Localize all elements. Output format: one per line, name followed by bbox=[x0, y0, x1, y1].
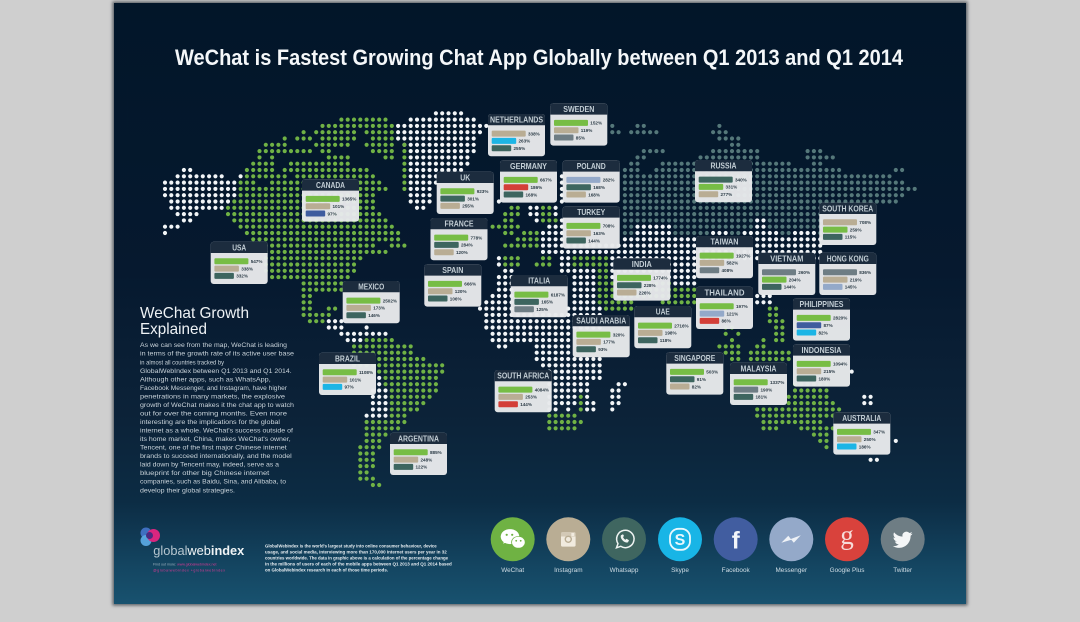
France bars: 120% bbox=[456, 250, 468, 255]
legend: Google Plus: Google Plus bbox=[830, 567, 864, 574]
UAE bars: 118% bbox=[660, 338, 671, 343]
card: Argentina bbox=[390, 433, 447, 475]
icon: Twitter bird bbox=[893, 532, 913, 548]
Italia bars: 165% bbox=[541, 300, 553, 305]
Vietnam heading: VIETNAM bbox=[770, 253, 803, 263]
icon: Instagram camera bbox=[561, 532, 576, 547]
Malaysia bars: 181% bbox=[756, 395, 767, 400]
India bars: 1774% bbox=[653, 276, 668, 281]
India heading: INDIA bbox=[632, 259, 652, 269]
Netherlands bars: 255% bbox=[514, 146, 525, 151]
title: WeChat is Fastest Growing Chat App Globally between Q1 2013 and Q1 2014 bbox=[175, 45, 903, 70]
about GlobalWebIndex text: on GlobalWebIndex research in each of those time periods. bbox=[265, 568, 388, 572]
Taiwan bars: 408% bbox=[722, 268, 733, 273]
explanation text block: internet as a whole. WeChat's success outside of bbox=[140, 428, 293, 434]
Spain bars: 120% bbox=[455, 289, 467, 294]
map: green dots bbox=[228, 120, 840, 485]
icon: Whatsapp phone bbox=[616, 530, 634, 548]
Canada bars: 97% bbox=[328, 211, 337, 216]
South Africa bars bbox=[498, 387, 549, 407]
Brazil bars bbox=[323, 369, 373, 390]
Argentina heading: ARGENTINA bbox=[398, 433, 439, 443]
India bars: 228% bbox=[644, 283, 656, 288]
Russia heading: RUSSIA bbox=[710, 161, 736, 171]
USA bars: 547% bbox=[251, 259, 262, 264]
Philippines bars bbox=[797, 315, 847, 336]
card: Mexico bbox=[343, 281, 400, 323]
Saudi Arabia heading: SAUDI ARABIA bbox=[576, 316, 626, 326]
explanation text block: in almost all countries tracked by bbox=[140, 359, 225, 366]
Mexico heading: MEXICO bbox=[358, 282, 385, 292]
Brazil bars: 97% bbox=[344, 385, 354, 390]
icon: Messenger bolt bbox=[781, 535, 801, 543]
Sweden bars bbox=[554, 120, 602, 140]
explanation text block: Facebook Messenger, and Instagram, have higher bbox=[140, 385, 288, 392]
UK heading: UK bbox=[460, 172, 470, 182]
South Africa bars: 4084% bbox=[535, 387, 549, 392]
Russia bars: 331% bbox=[726, 185, 737, 190]
Brazil bars: 101% bbox=[350, 377, 361, 382]
explanation text block: Tencent, one of the first major Chinese internet bbox=[140, 445, 287, 452]
Germany bars: 186% bbox=[530, 185, 542, 190]
Taiwan bars bbox=[700, 253, 750, 273]
Italia heading: ITALIA bbox=[528, 276, 550, 286]
Saudi Arabia bars: 177% bbox=[603, 340, 615, 345]
explanation text block: laid down by Tencent may, indeed, serve as a bbox=[140, 462, 279, 469]
Australia bars bbox=[837, 429, 885, 450]
card: Poland bbox=[563, 160, 620, 203]
Sweden bars: 119% bbox=[581, 128, 592, 133]
Singapore bars bbox=[670, 369, 718, 390]
legend: Facebook bbox=[714, 517, 758, 574]
Thailand bars: 197% bbox=[736, 304, 748, 309]
Thailand bars bbox=[700, 303, 748, 324]
Poland heading: POLAND bbox=[577, 161, 606, 171]
legend: Skype bbox=[658, 517, 702, 574]
about GlobalWebIndex text: usage, and social media, interviewing more than 170,000 internet users per year in 32 bbox=[265, 550, 447, 554]
Sweden bars: 85% bbox=[576, 135, 585, 140]
explanation text block: As we can see from the map, WeChat is leading bbox=[140, 342, 287, 349]
Germany bars: 667% bbox=[540, 178, 552, 183]
Sweden bars: 152% bbox=[590, 121, 602, 126]
card: UK bbox=[437, 172, 494, 214]
Netherlands heading: NETHERLANDS bbox=[490, 115, 543, 125]
Singapore bars: 503% bbox=[706, 370, 718, 375]
Russia bars bbox=[699, 177, 747, 197]
Spain bars bbox=[428, 281, 476, 302]
Philippines heading: PHILIPPINES bbox=[800, 299, 844, 309]
legend: Twitter: Twitter bbox=[893, 567, 913, 574]
icon: Facebook f: f bbox=[732, 527, 741, 554]
about GlobalWebIndex text: GlobalWebIndex is the world's largest study into online consumer behaviour, device bbox=[265, 544, 437, 548]
Vietnam bars: 260% bbox=[798, 270, 810, 275]
India bars bbox=[617, 275, 668, 296]
card: Sweden bbox=[550, 103, 607, 146]
legend: Skype: Skype bbox=[671, 567, 689, 574]
Australia heading: AUSTRALIA bbox=[842, 413, 881, 423]
Vietnam bars: 144% bbox=[784, 285, 796, 290]
Indonesia bars: 180% bbox=[818, 376, 830, 381]
Germany bars: 168% bbox=[526, 192, 537, 197]
explanation text block: GlobalWebIndex between Q1 2013 and Q1 2014. bbox=[140, 368, 292, 375]
Philippines bars: 87% bbox=[824, 323, 833, 328]
Italia bars: 6187% bbox=[551, 292, 565, 297]
card: Philippines bbox=[793, 298, 850, 341]
USA bars: 338% bbox=[241, 266, 253, 271]
card: India bbox=[613, 258, 670, 301]
globalwebindex logo bbox=[140, 528, 245, 558]
legend: WeChat bbox=[491, 517, 535, 574]
South Korea bars: 115% bbox=[845, 235, 856, 240]
Hong Kong bars: 836% bbox=[859, 270, 871, 275]
card: Hong Kong bbox=[819, 253, 876, 295]
card: Thailand bbox=[696, 287, 753, 329]
card: Russia bbox=[695, 160, 752, 202]
Russia bars: 340% bbox=[735, 177, 747, 182]
Canada heading: CANADA bbox=[316, 180, 345, 190]
Netherlands bars bbox=[492, 131, 540, 151]
UK bars: 301% bbox=[467, 196, 479, 201]
explanation text block: in terms of the growth rate of its active user base bbox=[140, 351, 294, 358]
South Korea bars: 708% bbox=[859, 220, 871, 225]
legend: Facebook: Facebook bbox=[722, 567, 751, 574]
Thailand bars: 86% bbox=[722, 319, 731, 324]
Argentina bars bbox=[394, 449, 442, 470]
poster panel bbox=[114, 3, 966, 604]
card: Taiwan bbox=[696, 236, 753, 278]
Mexico bars: 173% bbox=[373, 306, 385, 311]
France bars: 778% bbox=[470, 235, 482, 240]
South Korea bars bbox=[823, 219, 871, 240]
legend: Whatsapp bbox=[602, 517, 646, 574]
France bars: 284% bbox=[461, 243, 473, 248]
legend: Instagram: Instagram bbox=[554, 567, 583, 574]
about GlobalWebIndex text bbox=[265, 544, 452, 572]
card: Germany bbox=[500, 160, 557, 203]
Argentina bars: 122% bbox=[416, 465, 427, 470]
legend: Instagram bbox=[546, 517, 590, 574]
Saudi Arabia bars bbox=[576, 332, 624, 352]
explanation text block: blueprint for other big Chinese internet bbox=[140, 470, 270, 477]
Australia bars: 347% bbox=[873, 430, 885, 435]
Indonesia bars: 1094% bbox=[833, 362, 847, 367]
Brazil heading: BRAZIL bbox=[335, 353, 360, 363]
icon: Skype S: S bbox=[675, 532, 686, 549]
Spain bars: 106% bbox=[450, 296, 462, 301]
Spain heading: SPAIN bbox=[442, 265, 463, 275]
Malaysia bars: 1337% bbox=[770, 380, 784, 385]
Malaysia bars bbox=[734, 379, 784, 400]
Canada bars: 1365% bbox=[342, 197, 356, 202]
explanation text block: Although other apps, such as WhatsApp, bbox=[140, 376, 271, 383]
explanation text block: its home market, China, makes WeChat's owner, bbox=[140, 436, 291, 443]
Indonesia bars bbox=[797, 361, 847, 382]
Philippines bars: 82% bbox=[818, 330, 828, 335]
Spain bars: 666% bbox=[464, 282, 476, 287]
UK bars: 923% bbox=[477, 189, 488, 194]
Turkey bars bbox=[566, 223, 614, 244]
Australia bars: 250% bbox=[864, 437, 876, 442]
explanation text block: brands to succeed internationally, and the model bbox=[140, 453, 292, 460]
legend: Whatsapp: Whatsapp bbox=[610, 567, 639, 574]
logo contact links: Find out more: www.globalwebindex.net bbox=[153, 562, 217, 566]
South Africa heading: SOUTH AFRICA bbox=[497, 371, 549, 381]
card: Spain bbox=[424, 264, 481, 307]
Thailand heading: THAILAND bbox=[704, 287, 744, 297]
Germany heading: GERMANY bbox=[510, 161, 547, 171]
Argentina bars: 885% bbox=[430, 450, 442, 455]
card: USA bbox=[211, 242, 268, 284]
explanation text block: develop their global strategies. bbox=[140, 487, 235, 494]
USA bars: 332% bbox=[236, 274, 248, 279]
Indonesia heading: INDONESIA bbox=[802, 345, 842, 355]
Mexico bars: 2502% bbox=[383, 298, 397, 303]
Mexico bars bbox=[346, 298, 397, 318]
Canada bars: 101% bbox=[332, 204, 344, 209]
Vietnam bars: 204% bbox=[789, 277, 801, 282]
Mexico bars: 146% bbox=[368, 313, 380, 318]
South Africa bars: 253% bbox=[525, 395, 537, 400]
explanation text block bbox=[140, 342, 294, 494]
UAE bars bbox=[638, 323, 689, 343]
card: Malaysia bbox=[730, 363, 787, 405]
card: South Korea bbox=[819, 203, 876, 245]
icon: Google g: g bbox=[840, 520, 854, 550]
USA bars bbox=[214, 258, 262, 279]
Turkey heading: TURKEY bbox=[577, 207, 606, 217]
legend: Twitter bbox=[881, 517, 925, 574]
Thailand bars: 121% bbox=[726, 311, 738, 316]
France bars bbox=[434, 235, 482, 255]
card: Australia bbox=[833, 412, 890, 455]
UAE heading: UAE bbox=[656, 307, 670, 317]
Hong Kong bars bbox=[823, 269, 871, 290]
Poland bars: 282% bbox=[603, 178, 614, 183]
Poland bars: 168% bbox=[593, 185, 605, 190]
card: Indonesia bbox=[793, 344, 850, 387]
about GlobalWebIndex text: countries worldwide. The data in graphic above is a calculation of the percentage change bbox=[265, 556, 448, 560]
Turkey bars: 163% bbox=[593, 231, 605, 236]
UK bars: 255% bbox=[462, 204, 474, 209]
Sweden heading: SWEDEN bbox=[563, 104, 594, 114]
UAE bars: 198% bbox=[665, 331, 677, 336]
USA heading: USA bbox=[232, 242, 246, 252]
Singapore bars: 82% bbox=[692, 384, 701, 389]
Poland bars bbox=[566, 177, 614, 198]
Canada bars bbox=[306, 196, 356, 216]
Malaysia bars: 190% bbox=[760, 387, 772, 392]
Singapore heading: SINGAPORE bbox=[674, 353, 716, 363]
Hong Kong heading: HONG KONG bbox=[827, 253, 869, 263]
explanation text block: out for over the coming months. Even more bbox=[140, 410, 287, 418]
legend: Messenger bbox=[769, 517, 813, 574]
card: Singapore bbox=[666, 352, 723, 395]
Germany bars bbox=[504, 177, 552, 198]
card: France bbox=[430, 218, 488, 260]
explanation text block: growth of WeChat makes it the chat app to watch bbox=[140, 402, 294, 409]
logo contact links: @globalwebindex +globalwebindex bbox=[153, 568, 225, 572]
legend: WeChat: WeChat bbox=[501, 567, 524, 574]
Italia bars bbox=[514, 292, 565, 312]
Poland bars: 168% bbox=[588, 192, 600, 197]
card: Turkey bbox=[563, 206, 620, 249]
Taiwan bars: 582% bbox=[726, 261, 738, 266]
South Korea heading: SOUTH KOREA bbox=[822, 203, 873, 213]
explanation text block: penetrations in many markets, the explosive bbox=[140, 393, 285, 400]
Turkey bars: 144% bbox=[588, 238, 600, 243]
explanation text block: interesting are the implications for the global bbox=[140, 419, 281, 426]
South Africa bars: 144% bbox=[520, 402, 532, 407]
card: Netherlands bbox=[488, 114, 545, 156]
France heading: FRANCE bbox=[444, 219, 474, 229]
South Korea bars: 259% bbox=[850, 227, 862, 232]
UAE bars: 2716% bbox=[674, 323, 689, 328]
card: Canada bbox=[302, 179, 359, 222]
section heading: WeChat Growth Explained: WeChat Growth bbox=[140, 305, 249, 322]
Singapore bars: 91% bbox=[697, 377, 706, 382]
Saudi Arabia bars: 320% bbox=[613, 332, 624, 337]
card: Italia bbox=[511, 275, 568, 317]
section heading: WeChat Growth Explained bbox=[140, 305, 249, 338]
Brazil bars: 1108% bbox=[359, 370, 373, 375]
about GlobalWebIndex text: in the millions of users of each of the mobile apps between Q1 2013 and Q1 2014 based bbox=[265, 562, 452, 566]
Taiwan bars: 1927% bbox=[736, 253, 750, 258]
Netherlands bars: 263% bbox=[518, 139, 530, 144]
map: Russia dim dots bbox=[612, 126, 915, 233]
Australia bars: 186% bbox=[859, 444, 871, 449]
card: Vietnam bbox=[758, 253, 815, 295]
icon: WeChat bubbles bbox=[501, 529, 526, 548]
Vietnam bars bbox=[762, 269, 810, 290]
map: white dots Alaska Greenland Africa Asia bbox=[165, 113, 896, 460]
Philippines bars: 2820% bbox=[833, 316, 847, 321]
Taiwan heading: TAIWAN bbox=[710, 237, 738, 247]
Hong Kong bars: 219% bbox=[850, 277, 862, 282]
globalwebindex logo: globalwebindex bbox=[153, 543, 245, 558]
section heading: WeChat Growth Explained: Explained bbox=[140, 321, 207, 338]
Russia bars: 277% bbox=[720, 192, 732, 197]
Indonesia bars: 215% bbox=[824, 369, 835, 374]
explanation text block: companies, such as Baidu, Sina, and Alibaba, to bbox=[140, 479, 286, 486]
Italia bars: 125% bbox=[536, 307, 548, 312]
Turkey bars: 708% bbox=[603, 224, 614, 229]
Saudi Arabia bars: 93% bbox=[598, 347, 607, 352]
card: Brazil bbox=[319, 353, 376, 395]
card: UAE bbox=[634, 306, 691, 348]
card: South Africa bbox=[495, 370, 552, 412]
Argentina bars: 248% bbox=[420, 457, 432, 462]
Hong Kong bars: 145% bbox=[845, 285, 857, 290]
UK bars bbox=[440, 188, 488, 209]
dotted world map bbox=[165, 113, 915, 485]
India bars: 226% bbox=[639, 290, 651, 295]
card: Saudi Arabia bbox=[573, 315, 630, 357]
legend: Messenger: Messenger bbox=[775, 567, 808, 574]
legend: Google Plus bbox=[825, 517, 869, 574]
Netherlands bars: 338% bbox=[528, 131, 540, 136]
Malaysia heading: MALAYSIA bbox=[740, 363, 776, 373]
logo contact links bbox=[153, 562, 225, 572]
poster shadow bbox=[112, 2, 968, 606]
